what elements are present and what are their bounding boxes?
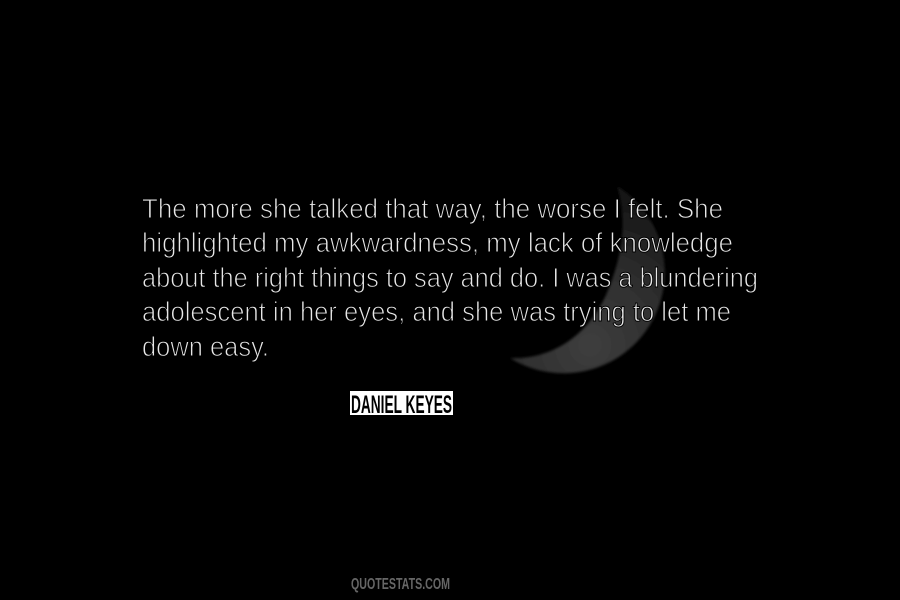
- quote line 1: The more she talked that way, the worse I felt. She: [142, 193, 723, 224]
- footer site name: QUOTESTATS.COM: [351, 576, 450, 593]
- author name: DANIEL KEYES: [351, 391, 452, 419]
- quote line 2: highlighted my awkwardness, my lack of knowledge: [142, 227, 733, 258]
- quote line 4: adolescent in her eyes, and she was trying to let me: [142, 296, 731, 327]
- quote line 5: down easy.: [142, 331, 269, 362]
- quote text: [142, 193, 758, 362]
- icon: crescent moon: [510, 186, 665, 373]
- author badge: [350, 391, 453, 419]
- quote line 3: about the right things to say and do. I was a blundering: [142, 262, 758, 293]
